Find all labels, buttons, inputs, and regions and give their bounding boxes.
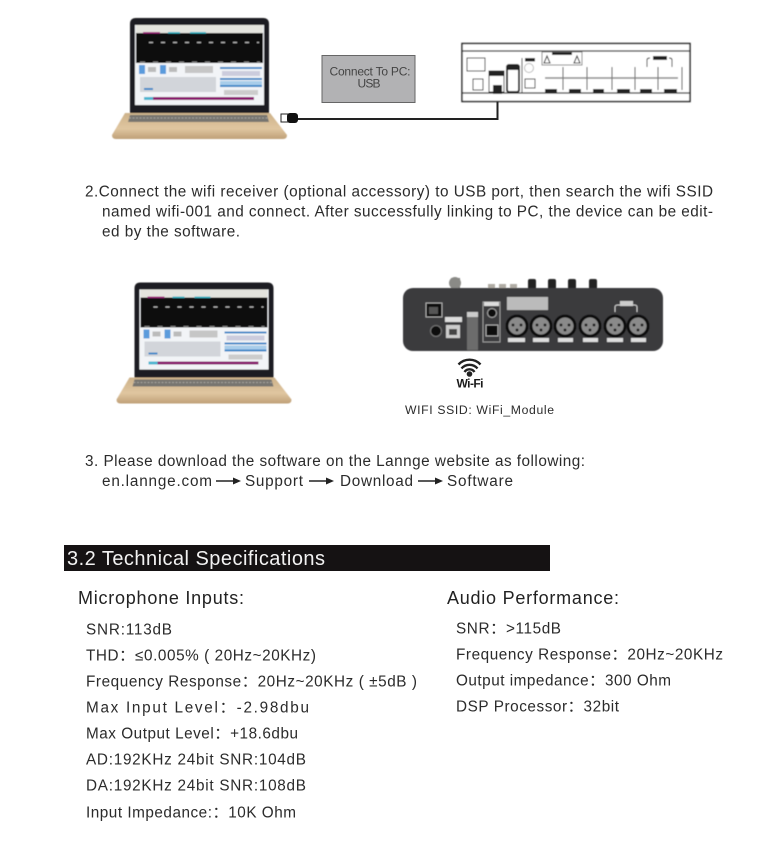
- step 2 text: ed by the software.: [102, 224, 240, 240]
- step 2 text: named wifi-001 and connect. After successfully linking to PC, the device can be edit-: [102, 204, 713, 220]
- list: microphone input specs: SNR:113dB: [86, 622, 172, 638]
- step 3 text: Download: [340, 473, 413, 490]
- list: audio performance specs: Output impedance：300 Ohm: [456, 672, 671, 690]
- list: audio performance specs: Frequency Response：20Hz~20KHz: [456, 646, 723, 664]
- list: audio performance specs: [456, 620, 723, 716]
- step 3 text: Software: [447, 473, 513, 490]
- icon: WiFi: [456, 360, 484, 390]
- section heading bar: 3.2 Technical Specifications: [67, 548, 325, 570]
- list: audio performance specs: DSP Processor：32bit: [456, 698, 620, 716]
- list: microphone input specs: AD:192KHz 24bit SNR:104dB: [86, 752, 306, 768]
- step 3 text: [85, 453, 585, 490]
- heading: microphone inputs: Microphone Inputs:: [78, 588, 244, 608]
- list: microphone input specs: Input Impedance:：10K Ohm: [86, 804, 296, 822]
- laptop with software, WiFi connection: [116, 282, 292, 404]
- list: microphone input specs: THD：≤0.005% ( 20Hz~20KHz): [86, 648, 316, 664]
- WiFi SSID caption: WIFI SSID: WiFi_Module: [405, 403, 554, 417]
- list: microphone input specs: Frequency Response：20Hz~20KHz ( ±5dB ): [86, 674, 417, 690]
- step 2 text: [85, 184, 713, 240]
- icon: WiFi: Wi-Fi: [456, 376, 484, 390]
- list: audio performance specs: SNR：>115dB: [456, 620, 561, 638]
- step 3 text: Support: [245, 473, 304, 490]
- laptop with software, USB connection: [112, 18, 287, 139]
- device rear photo: [403, 277, 663, 351]
- label box: connect to PC: [322, 56, 415, 102]
- list: microphone input specs: DA:192KHz 24bit SNR:108dB: [86, 778, 306, 794]
- heading: audio performance: Audio Performance:: [447, 588, 619, 608]
- label box: connect to PC: USB: [358, 76, 380, 90]
- USB plug and cable: [281, 92, 498, 123]
- step 3 text: en.lannge.com: [102, 473, 212, 490]
- label box: connect to PC: Connect To PC:: [330, 64, 410, 78]
- device rear panel line diagram: [462, 44, 690, 102]
- list: microphone input specs: [86, 622, 417, 822]
- arrows between website steps: [216, 478, 443, 484]
- step 3 text: 3. Please download the software on the Lannge website as following:: [85, 453, 585, 470]
- list: microphone input specs: Max Input Level：-2.98dbu: [86, 700, 309, 716]
- list: microphone input specs: Max Output Level：+18.6dbu: [86, 726, 298, 742]
- section heading bar: [64, 545, 550, 571]
- step 2 text: 2.Connect the wifi receiver (optional accessory) to USB port, then search the wifi SSID: [85, 184, 713, 200]
